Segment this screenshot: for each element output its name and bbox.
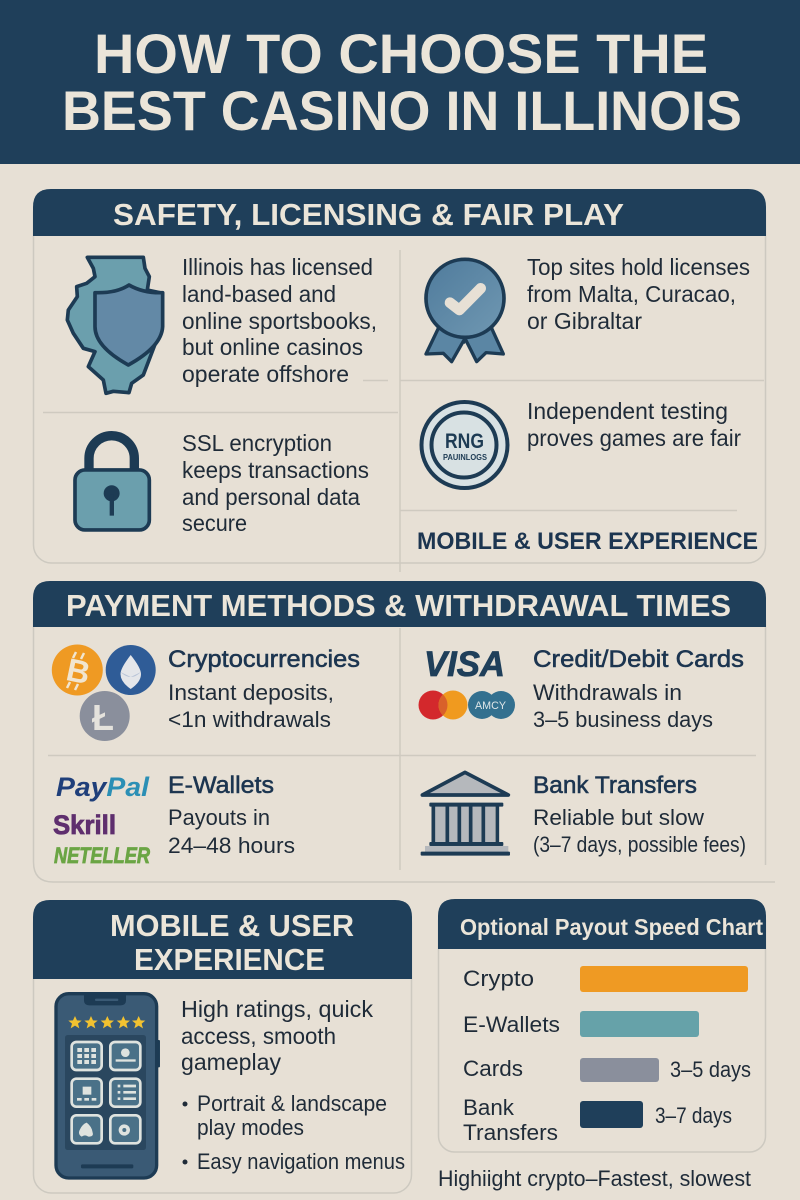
bar: bank transfers	[463, 1095, 732, 1145]
title banner	[0, 0, 800, 164]
text: mobile summary: High ratings, quick	[181, 996, 374, 1022]
panel heading: chart	[438, 899, 766, 949]
icon: RNG seal: PAUINLOGS	[443, 453, 488, 462]
list: mobile features	[182, 1091, 405, 1174]
icon: e-wallet logos	[53, 772, 150, 868]
bar: bank transfers: Bank	[463, 1095, 515, 1120]
bar: cards	[463, 1056, 751, 1082]
text: SSL encryption: keeps transactions	[182, 457, 369, 483]
bar: e-wallets: E-Wallets	[463, 1012, 560, 1037]
caption: chart note: Highiight crypto–Fastest, slowest	[438, 1166, 751, 1191]
text: credit and debit cards: Withdrawals in	[533, 680, 682, 705]
panel heading: mobile	[33, 900, 412, 979]
text: Illinois licensing: online sportsbooks,	[182, 308, 377, 334]
bar: cards: 3–5 days	[670, 1057, 751, 1082]
list: mobile features: Portrait & landscape	[197, 1091, 387, 1116]
icon: padlock	[75, 436, 149, 530]
text: mobile summary: access, smooth	[181, 1023, 336, 1049]
text: mobile summary: gameplay	[181, 1049, 281, 1075]
text: bank transfers: (3–7 days, possible fees)	[533, 832, 746, 857]
icon: Illinois map with shield	[67, 257, 163, 393]
text: e-wallets	[168, 772, 295, 858]
text: offshore licenses: Top sites hold licenses	[527, 254, 750, 280]
bar: crypto: Crypto	[463, 966, 534, 991]
text: SSL encryption	[182, 430, 369, 536]
list: mobile features: Easy navigation menus	[197, 1149, 405, 1174]
bar: crypto	[463, 966, 748, 992]
text: Illinois licensing: Illinois has licensed	[182, 254, 373, 280]
text: cryptocurrencies	[168, 646, 360, 732]
title: BEST CASINO IN ILLINOIS	[62, 79, 742, 142]
icon: card logos: AMCY	[475, 700, 507, 712]
panel heading: safety	[33, 189, 766, 236]
icon: crypto coins	[52, 644, 156, 741]
text: SSL encryption: and personal data	[182, 484, 360, 510]
title: HOW TO CHOOSE THE	[94, 22, 708, 85]
text: offshore licenses: or Gibraltar	[527, 308, 642, 334]
icon: card logos	[418, 645, 515, 720]
text: SSL encryption: SSL encryption	[182, 430, 332, 456]
panel: mobile and user experience	[33, 900, 412, 1193]
bar: e-wallets	[463, 1011, 699, 1037]
text: bank transfers: Reliable but slow	[533, 805, 704, 830]
text: offshore licenses: from Malta, Curacao,	[527, 281, 736, 307]
icon: e-wallet logos: NETELLER	[54, 843, 150, 868]
panel heading: mobile: MOBILE & USER	[110, 908, 354, 943]
bar: bank transfers: Transfers	[463, 1120, 558, 1145]
text: Illinois licensing: but online casinos	[182, 334, 363, 360]
icon: e-wallet logos: Skrill	[53, 810, 116, 840]
text: Illinois licensing	[182, 254, 377, 387]
text: independent testing: proves games are fair	[527, 425, 741, 451]
text: cryptocurrencies: Instant deposits,	[168, 680, 334, 705]
list: mobile features: play modes	[197, 1115, 304, 1140]
text: credit and debit cards: 3–5 business days	[533, 707, 713, 732]
icon: RNG seal	[422, 402, 508, 488]
panel: payment methods and withdrawal times	[33, 581, 775, 882]
text: independent testing	[527, 398, 741, 451]
bar chart	[463, 966, 751, 1145]
panel heading: chart: Optional Payout Speed Chart	[460, 914, 763, 940]
text: mobile summary	[181, 996, 374, 1075]
icon: card logos: VISA	[424, 645, 505, 684]
text: credit and debit cards	[533, 646, 744, 732]
text: independent testing: Independent testing	[527, 398, 728, 424]
text: SSL encryption: secure	[182, 510, 247, 536]
text: bank transfers	[533, 772, 746, 857]
icon: crypto coins: Ł	[92, 697, 114, 738]
text: e-wallets: Payouts in	[168, 805, 270, 830]
icon: smartphone with rating and apps	[56, 994, 160, 1178]
panel heading: safety: SAFETY, LICENSING & FAIR PLAY	[113, 197, 624, 232]
icon: bank building	[421, 772, 510, 856]
bar: bank transfers: 3–7 days	[655, 1103, 732, 1128]
icon: e-wallet logos: PayPal	[56, 772, 150, 802]
text: bank transfers: Bank Transfers	[533, 772, 697, 799]
text: cryptocurrencies: Cryptocurrencies	[168, 646, 360, 673]
text: e-wallets: E-Wallets	[168, 772, 274, 799]
text: Illinois licensing: operate offshore	[182, 361, 349, 387]
sub-heading: mobile and user experience: MOBILE & USER EXPERIENCE	[417, 528, 758, 555]
bar: cards: Cards	[463, 1056, 523, 1081]
panel: safety, licensing and fair play	[33, 189, 766, 572]
panel: payout speed chart	[438, 899, 766, 1152]
title	[62, 22, 742, 142]
text: Illinois licensing: land-based and	[182, 281, 336, 307]
icon: RNG seal: RNG	[445, 430, 484, 453]
text: credit and debit cards: Credit/Debit Cards	[533, 646, 744, 673]
icon: license badge with check	[426, 259, 504, 362]
text: e-wallets: 24–48 hours	[168, 833, 295, 858]
icon: crypto coins: B	[63, 651, 93, 691]
text: offshore licenses	[527, 254, 750, 334]
text: cryptocurrencies: <1n withdrawals	[168, 707, 331, 732]
panel heading: payments: PAYMENT METHODS & WITHDRAWAL TIMES	[66, 588, 731, 623]
panel heading: mobile: EXPERIENCE	[134, 942, 325, 977]
panel heading: payments	[33, 581, 766, 627]
